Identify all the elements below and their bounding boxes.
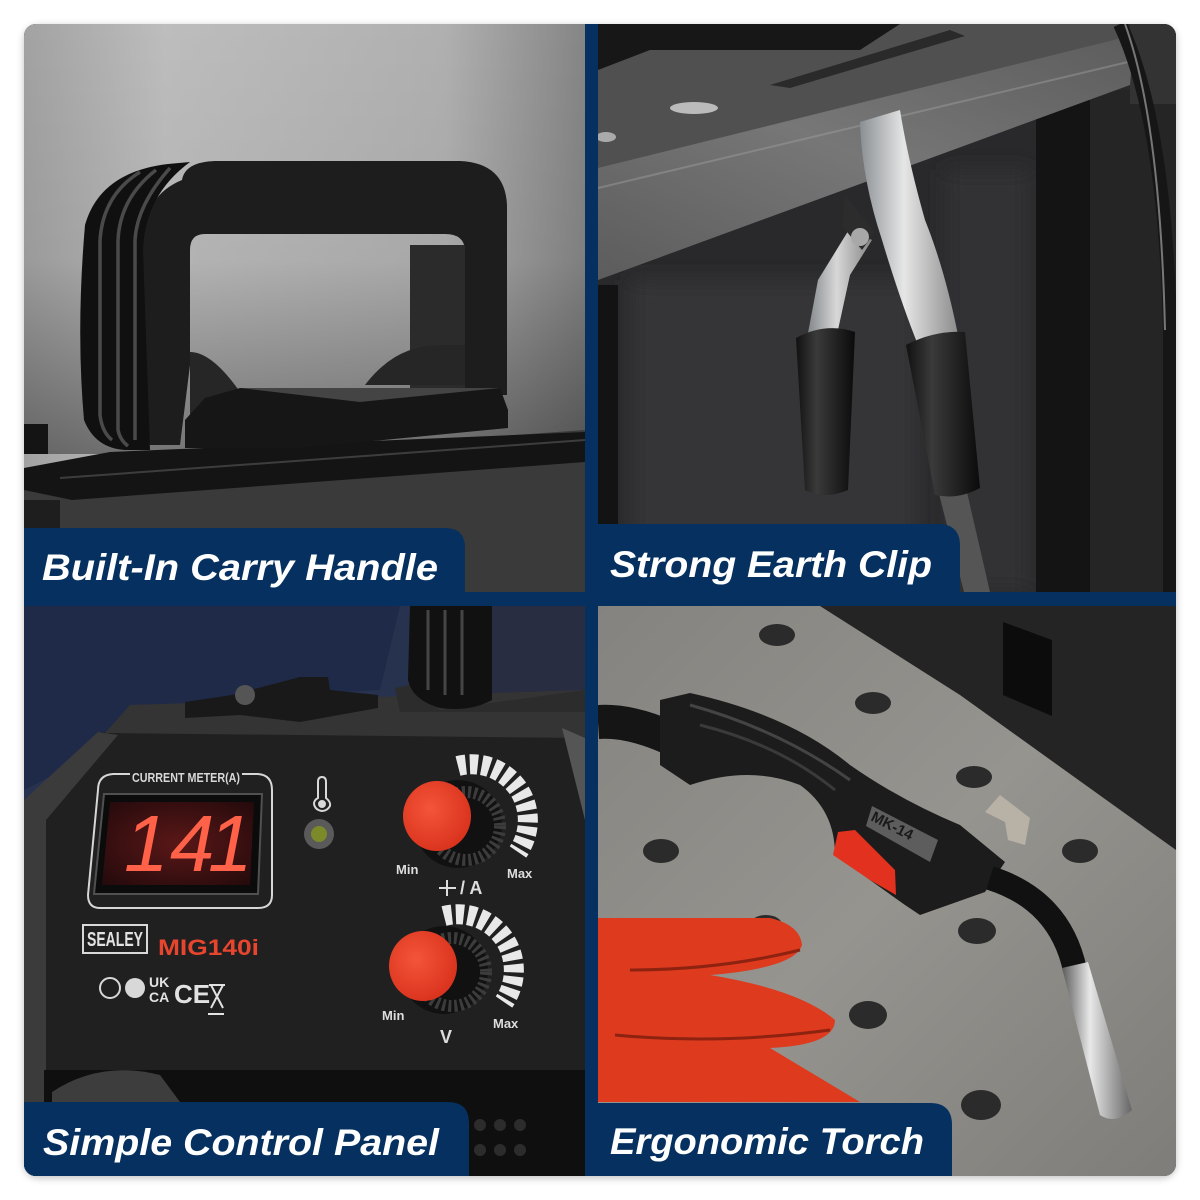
- neck: [990, 878, 1075, 970]
- plate holes: [643, 624, 1098, 1120]
- icon: hinge: [185, 677, 378, 722]
- sleeve: right: [906, 332, 980, 496]
- certification marks: [100, 974, 225, 1014]
- logo: MIG140i: [158, 935, 259, 960]
- machine body: [24, 430, 585, 592]
- nozzle: [1062, 962, 1132, 1119]
- icon: handle: [80, 161, 508, 450]
- label tab: strong earth clip: [585, 524, 960, 592]
- icon: glove: [598, 918, 860, 1102]
- certification marks: CE: [174, 979, 210, 1009]
- dial: current: [396, 764, 533, 898]
- cable: [1120, 24, 1170, 592]
- dial: voltage: [382, 914, 519, 1047]
- panel: control panel photo: [24, 606, 585, 1176]
- label tab: strong earth clip: Strong Earth Clip: [610, 544, 932, 585]
- label tab: simple control panel: [24, 1102, 469, 1176]
- icon: torch: MK-14: [868, 808, 917, 844]
- bench: [1130, 24, 1176, 104]
- text: current meter: CURRENT METER(A): [132, 771, 240, 785]
- icon: earth clamp: [796, 110, 990, 592]
- label tab: ergonomic torch: Ergonomic Torch: [610, 1121, 924, 1162]
- label tab: ergonomic torch: [585, 1103, 952, 1176]
- icon: thermometer: [314, 777, 330, 811]
- certification marks: UK: [149, 974, 169, 990]
- cable: [598, 722, 670, 738]
- logo: [82, 924, 258, 955]
- label tab: built-in carry handle: Built-In Carry Handle: [42, 547, 438, 588]
- trigger: [833, 830, 896, 895]
- dial: current: Min: [396, 862, 418, 877]
- text: readout 141: 141: [124, 799, 252, 888]
- panel: torch photo: [598, 606, 1176, 1176]
- meter: [88, 771, 272, 908]
- panel: earth clip photo: [596, 24, 1176, 592]
- dial: current: Max: [507, 866, 533, 881]
- dial: current: / A: [460, 878, 482, 898]
- icon: handle base: [395, 606, 585, 712]
- certification marks: CA: [149, 989, 169, 1005]
- icon: LED: [304, 819, 334, 849]
- machine behind: [820, 606, 1176, 850]
- panel: carry handle photo: [24, 24, 585, 592]
- cable below clip: [938, 488, 990, 592]
- icon: torch: [660, 693, 1132, 1119]
- label tab: built-in carry handle: [24, 528, 465, 592]
- label tab: simple control panel: Simple Control Panel: [43, 1122, 440, 1163]
- logo: SEALEY: [87, 929, 143, 951]
- dial: voltage: Min: [382, 1008, 404, 1023]
- sleeve: left: [796, 328, 855, 495]
- dial: voltage: V: [440, 1027, 452, 1047]
- dial: voltage: Max: [493, 1016, 519, 1031]
- MK-14 plate: [866, 806, 938, 862]
